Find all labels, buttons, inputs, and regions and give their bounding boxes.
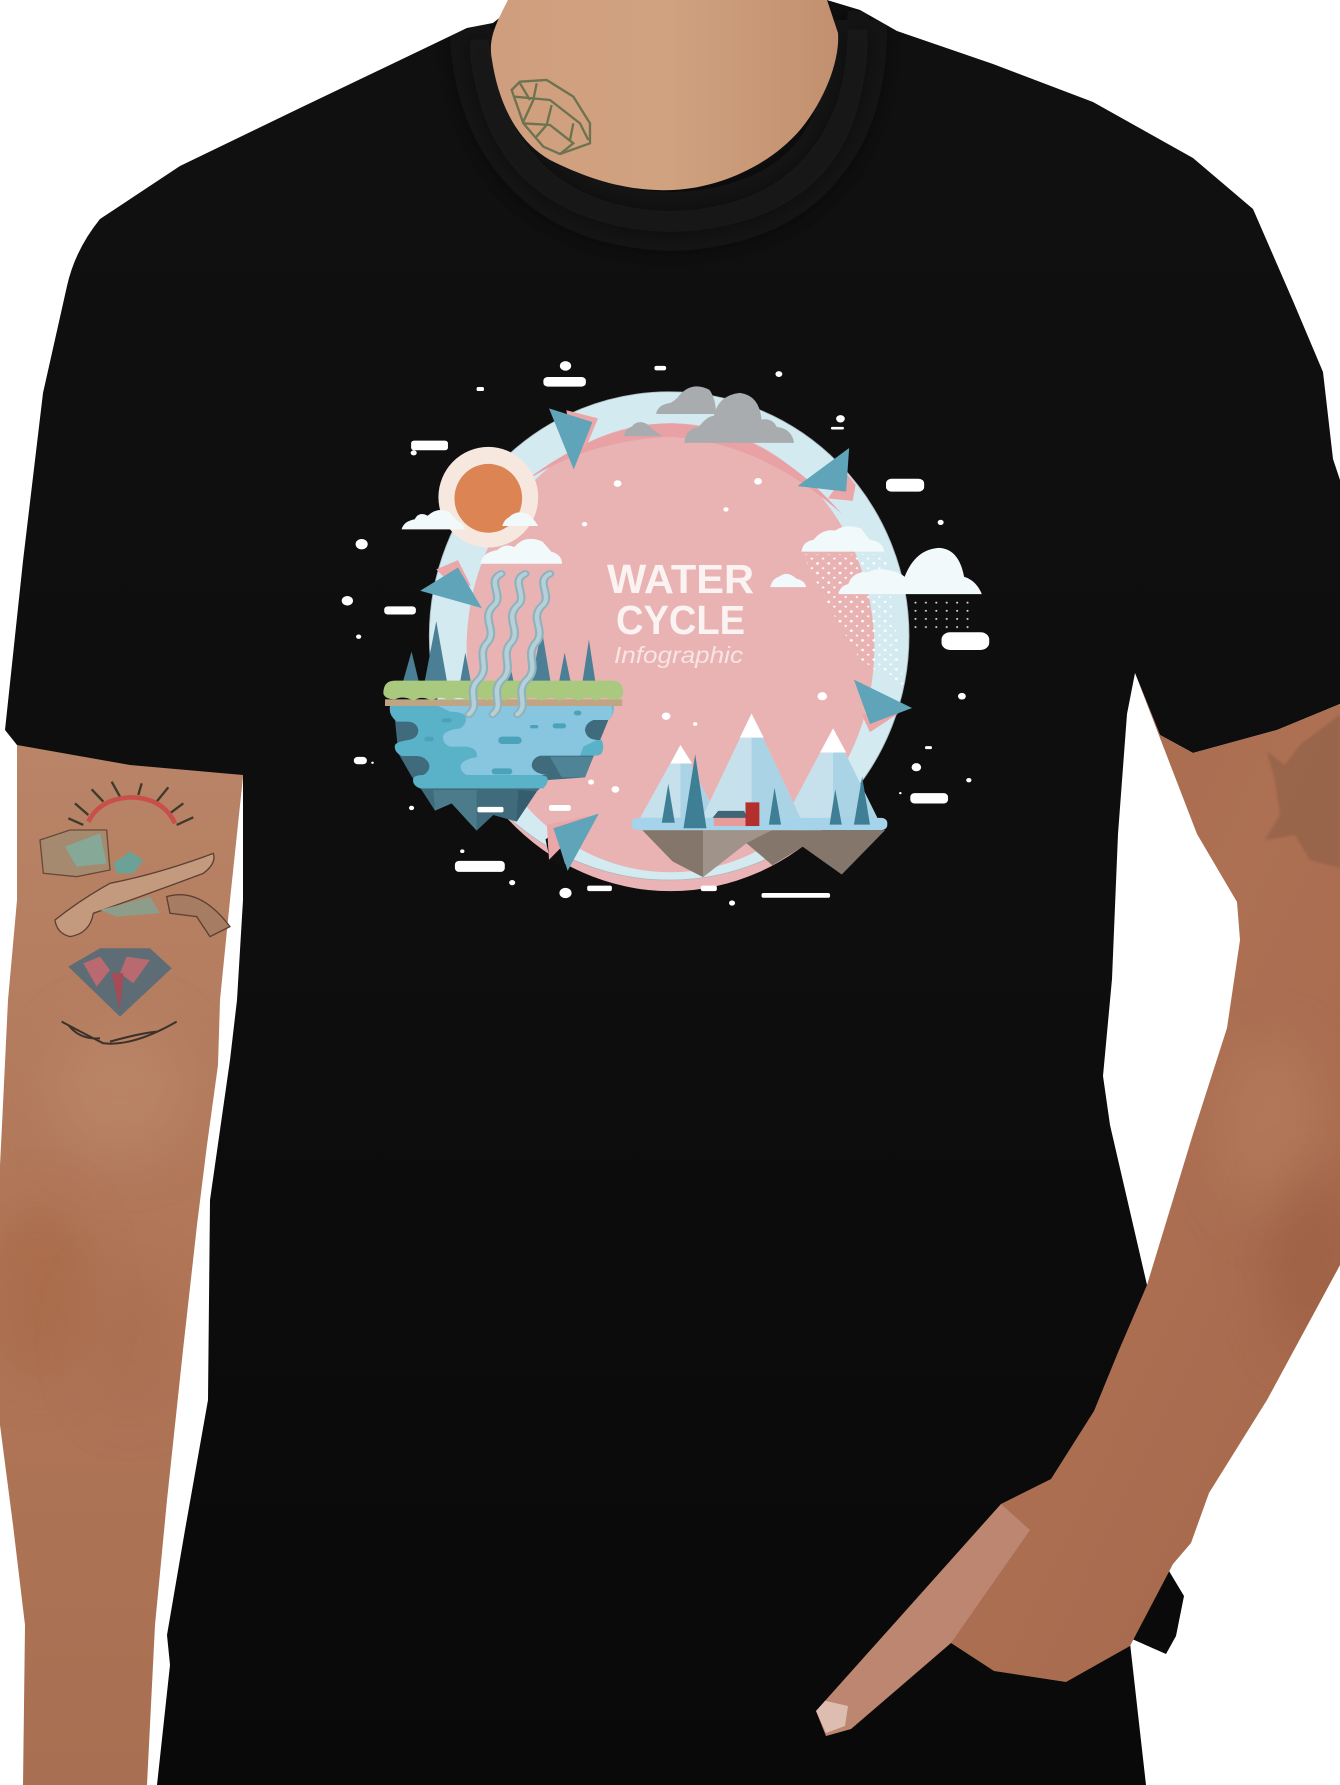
barn and silo bbox=[713, 802, 759, 826]
thumb bbox=[816, 1504, 1030, 1736]
pocket flap bbox=[1132, 1571, 1184, 1654]
steam wave right bbox=[517, 574, 550, 714]
arrow: left bbox=[420, 560, 482, 608]
white cloud left of sun bbox=[402, 510, 464, 529]
grey cloud medium bbox=[656, 386, 716, 414]
steam wave middle bbox=[493, 574, 525, 714]
title: WATER CYCLE Infographic: CYCLE bbox=[616, 597, 745, 643]
left arm tattoos bbox=[40, 782, 230, 1044]
neck bbox=[491, 0, 838, 190]
title: WATER CYCLE Infographic bbox=[607, 556, 754, 668]
white cloud tiny bbox=[770, 574, 806, 587]
soil strip bbox=[385, 699, 622, 706]
floating particles and dashes bbox=[342, 361, 989, 906]
forest pine trees bbox=[403, 621, 595, 686]
rock underside bbox=[642, 830, 885, 877]
teal water bbox=[390, 706, 614, 788]
water cycle infographic print bbox=[342, 361, 989, 906]
arrow: top left bbox=[549, 408, 598, 469]
mountain centre bbox=[702, 714, 801, 818]
rain under big cloud bbox=[911, 599, 976, 629]
grey cloud large bbox=[684, 393, 794, 443]
right arm wolf tattoo bbox=[1265, 715, 1340, 868]
mountain right bbox=[785, 728, 877, 818]
grey cloud small bbox=[624, 422, 663, 436]
arrow: bottom bbox=[547, 813, 599, 871]
arrow: top right bbox=[798, 448, 856, 501]
grass bbox=[383, 681, 623, 701]
ground platform bbox=[631, 818, 887, 830]
right island: mountains bbox=[631, 714, 887, 877]
left arm bbox=[0, 740, 250, 1785]
white cloud small over sun bbox=[502, 512, 538, 526]
title: WATER CYCLE Infographic: WATER bbox=[607, 556, 754, 602]
thumbnail bbox=[816, 1700, 848, 1733]
rock underside bbox=[395, 720, 608, 831]
rain on ring bbox=[803, 555, 905, 691]
light blue water bbox=[438, 706, 613, 775]
white rain cloud upper bbox=[801, 526, 884, 552]
pine trees bbox=[662, 754, 870, 828]
neck tattoo bbox=[512, 80, 590, 154]
white cloud over steam bbox=[480, 539, 562, 564]
big white rain cloud bbox=[839, 548, 982, 594]
steam wave left bbox=[469, 574, 501, 714]
arrow: right bbox=[854, 680, 912, 732]
sun bbox=[438, 447, 538, 548]
illustration artwork bbox=[402, 386, 982, 891]
right arm and hand bbox=[800, 660, 1340, 1785]
steam waves bbox=[469, 574, 550, 714]
circular cycle ring bbox=[429, 392, 909, 891]
title: WATER CYCLE Infographic: Infographic bbox=[614, 642, 744, 668]
mountain left bbox=[640, 745, 718, 818]
left island: grass and water bbox=[383, 681, 623, 831]
water ripples bbox=[424, 711, 581, 774]
